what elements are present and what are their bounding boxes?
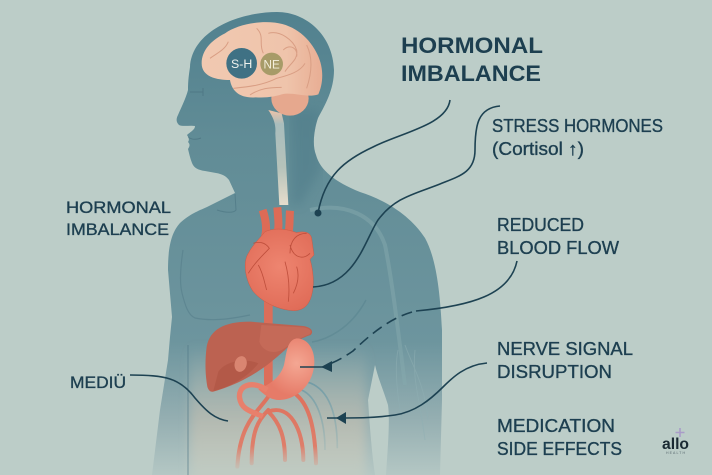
cerebrum <box>202 22 322 97</box>
cerebellum <box>271 81 309 116</box>
label: left hormonal imbalance: HORMONAL <box>66 198 171 217</box>
label: reduced blood flow <box>497 214 620 258</box>
label: medication side effects <box>497 415 622 459</box>
S-H circle <box>226 48 257 79</box>
label: stress hormones: (Cortisol ↑) <box>492 139 584 159</box>
logo <box>662 428 689 455</box>
logo: HEALTH <box>666 451 685 455</box>
organs <box>205 207 337 467</box>
label: stress hormones: STRESS HORMONES <box>492 116 663 136</box>
pointer: stomach stub <box>300 366 327 368</box>
label: nerve signal disruption <box>497 338 633 382</box>
title: IMBALANCE <box>401 61 541 86</box>
logo: allo <box>662 436 689 453</box>
pointer lines <box>130 100 517 421</box>
pointer: reduced blood flow <box>416 261 517 311</box>
arteries <box>237 302 316 467</box>
label: stress hormones <box>492 116 663 159</box>
label: nerve signal disruption: NERVE SIGNAL <box>497 338 633 359</box>
liver <box>205 322 312 392</box>
brain and neurotransmitters <box>202 22 322 205</box>
label: nerve signal disruption: DISRUPTION <box>497 361 612 382</box>
label: left hormonal imbalance: IMBALANCE <box>66 220 169 239</box>
label: reduced blood flow: BLOOD FLOW <box>497 237 620 258</box>
title: HORMONAL <box>401 33 543 58</box>
NE circle <box>260 53 283 75</box>
pointer: nerve signal <box>327 363 487 418</box>
label: medication side effects: MEDICATION <box>497 415 615 436</box>
spinal cord <box>268 110 288 205</box>
pointer: hormonal imbalance <box>318 100 450 213</box>
heart <box>245 207 314 311</box>
lower torso fade <box>190 345 366 475</box>
stomach <box>239 338 314 417</box>
blue nerves <box>302 382 337 450</box>
human body silhouette <box>152 12 442 475</box>
pointer: dashed signal <box>327 312 412 365</box>
label: left hormonal imbalance <box>66 198 171 239</box>
pointer: stress hormones <box>313 106 500 287</box>
label: reduced blood flow: REDUCED <box>497 214 584 235</box>
dot and arrowheads <box>314 210 346 424</box>
pointer: medi <box>130 375 228 421</box>
label: medication side effects: SIDE EFFECTS <box>497 438 622 459</box>
title <box>401 33 543 86</box>
S-H circle: S-H <box>231 57 252 71</box>
label: medi: MEDIÜ <box>70 373 126 392</box>
NE circle: NE <box>264 58 280 71</box>
